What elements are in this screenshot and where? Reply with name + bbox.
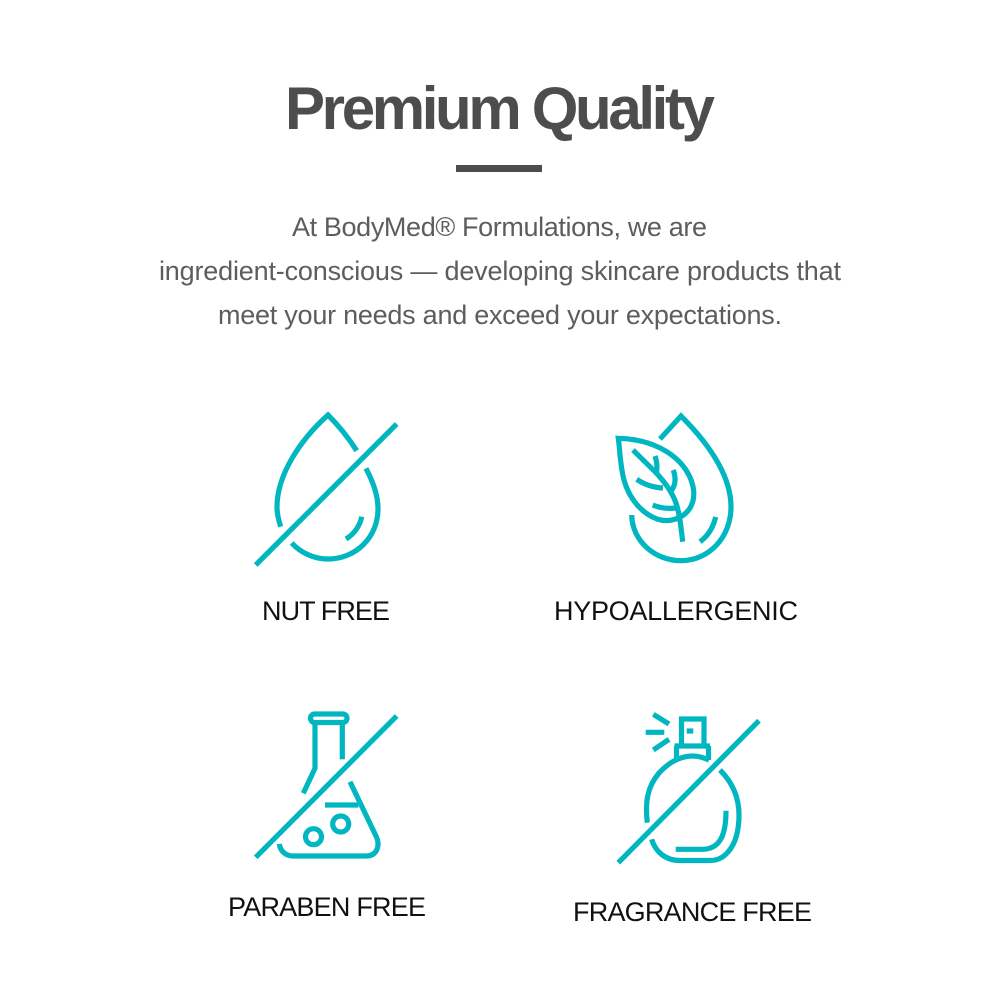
title: Premium Quality <box>285 75 716 142</box>
label: hypoallergenic: HYPOALLERGENIC <box>554 596 798 626</box>
label: paraben free: PARABEN FREE <box>228 892 426 922</box>
intro text block: meet your needs and exceed your expectations. <box>218 300 782 330</box>
intro text block: At BodyMed® Formulations, we are <box>292 212 707 242</box>
icon: paraben free flask <box>256 714 397 857</box>
label: fragrance free: FRAGRANCE FREE <box>573 897 812 927</box>
intro text block: ingredient-conscious — developing skincare products that <box>159 256 841 286</box>
title underline <box>456 165 542 172</box>
icon: nut free drop <box>256 415 397 565</box>
intro text block <box>159 212 841 330</box>
icon: hypoallergenic leaf and drop <box>618 416 731 561</box>
label: nut free: NUT FREE <box>262 596 390 626</box>
icon: fragrance free perfume bottle <box>618 714 759 863</box>
